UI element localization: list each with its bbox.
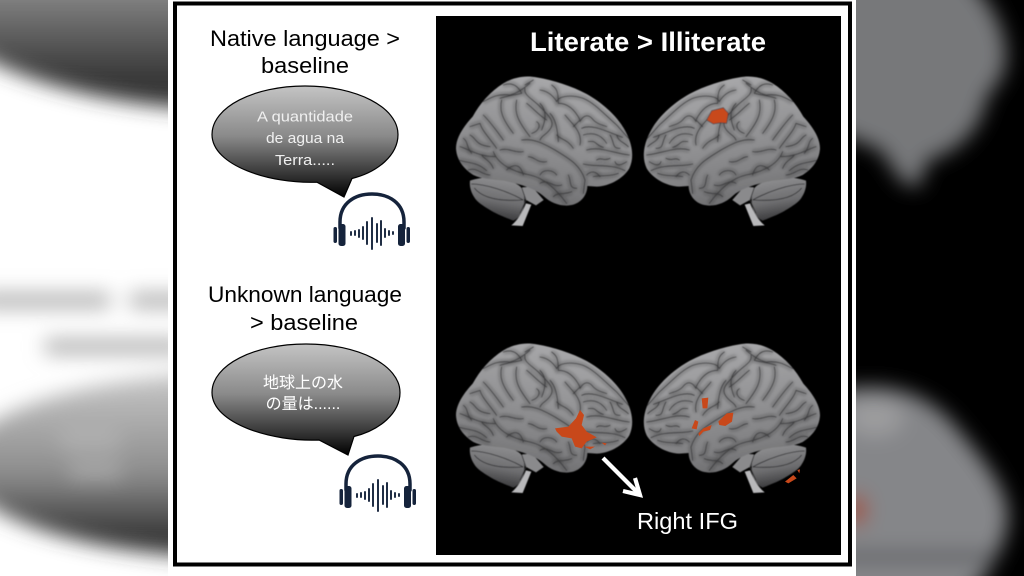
label: right IFG: Right IFG [637,508,738,534]
brain: bottom right [644,343,820,493]
heading: unknown language: Unknown language [208,282,402,307]
heading: unknown language: > baseline [250,310,358,335]
speech bubble: native language [212,86,398,197]
bubble text: Portuguese: de agua na [266,130,345,147]
heading: native language: Native language > [210,26,400,51]
brain: top left [456,76,632,226]
bubble text: Japanese: の量は...... [266,396,340,413]
arrow: to right IFG [603,458,640,495]
icon: headphones with waveform, unknown [340,456,416,511]
blurred backdrop: left side [0,0,168,572]
brain: top right with activation [644,76,820,226]
activation patch [707,108,728,124]
frame: outer border [175,4,850,564]
speech bubble: unknown language [212,344,400,455]
blurred backdrop: right side [856,0,1024,576]
heading: native language [210,26,400,78]
activation patches: bottom right brain [692,398,800,483]
heading: native language: baseline [261,53,349,78]
bubble text: Portuguese [257,108,353,169]
activation patches: right IFG [555,410,607,449]
heading: unknown language [208,282,402,335]
bubble text: Japanese [263,374,343,413]
brain: bottom left [456,343,632,493]
bubble text: Japanese: 地球上の水 [263,374,343,392]
bubble text: Portuguese: Terra..... [275,152,335,169]
title: Literate > Illiterate [530,27,766,57]
bubble text: Portuguese: A quantidade [257,108,353,126]
icon: headphones with waveform, native [334,194,410,249]
panel: black brain panel [436,16,841,555]
